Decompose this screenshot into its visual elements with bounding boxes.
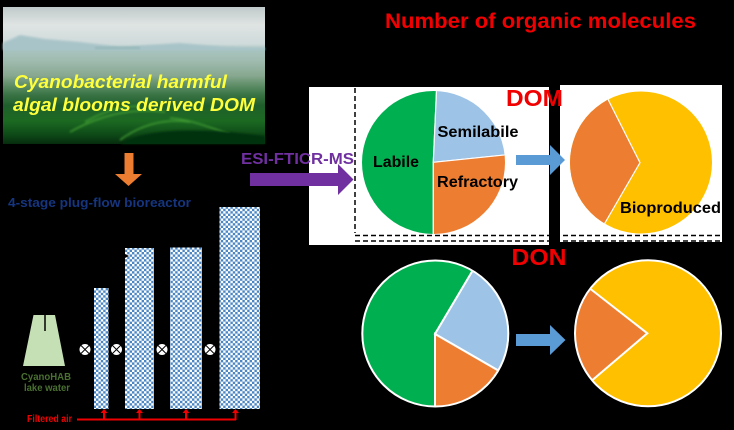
- label: Semilabile: Semilabile: [438, 124, 519, 141]
- arrow: orange down: [115, 153, 142, 186]
- label: Refractory: Refractory: [437, 174, 518, 191]
- label: DOM: DOM: [506, 85, 563, 111]
- diagram: bioreactor columns: [94, 207, 260, 409]
- title: Number of organic molecules: [385, 10, 696, 33]
- arrow: blue DON: [516, 325, 566, 355]
- label: CyanoHAB lake water: lake water: [24, 383, 70, 394]
- label: ESI-FTICR-MS: ESI-FTICR-MS: [241, 151, 354, 168]
- chart: DON pie right: [574, 259, 722, 408]
- photo: cyanobacterial bloom lake: [3, 7, 265, 144]
- panel: DOM bioproduced pie background: [560, 85, 722, 242]
- label: DON: DON: [512, 244, 566, 270]
- label: Filtered air: Filtered air: [27, 414, 72, 425]
- arrow: blue DOM: [516, 145, 565, 175]
- photo caption: algal blooms derived DOM: [13, 95, 256, 115]
- arrow: purple right: [250, 164, 354, 195]
- chart: DOM pie right: [570, 92, 720, 234]
- chart: DOM pie left: [362, 91, 518, 234]
- panel: DOM labile pie background: [309, 87, 549, 245]
- photo caption: [13, 72, 256, 115]
- icons: pumps: [79, 344, 216, 356]
- icon: lake water tank: [23, 315, 65, 366]
- label: Bioproduced: Bioproduced: [620, 200, 721, 217]
- photo caption: Cyanobacterial harmful: [14, 72, 228, 92]
- chart: DON pie left: [361, 260, 510, 408]
- label: CyanoHAB lake water: [21, 372, 71, 394]
- label: Labile: Labile: [373, 154, 419, 171]
- heading: bioreactor: 4-stage plug-flow bioreactor: [8, 195, 191, 210]
- dashed frame lines: [355, 88, 722, 241]
- label: CyanoHAB lake water: CyanoHAB: [21, 372, 71, 383]
- diagram: air line with arrows: [77, 409, 239, 420]
